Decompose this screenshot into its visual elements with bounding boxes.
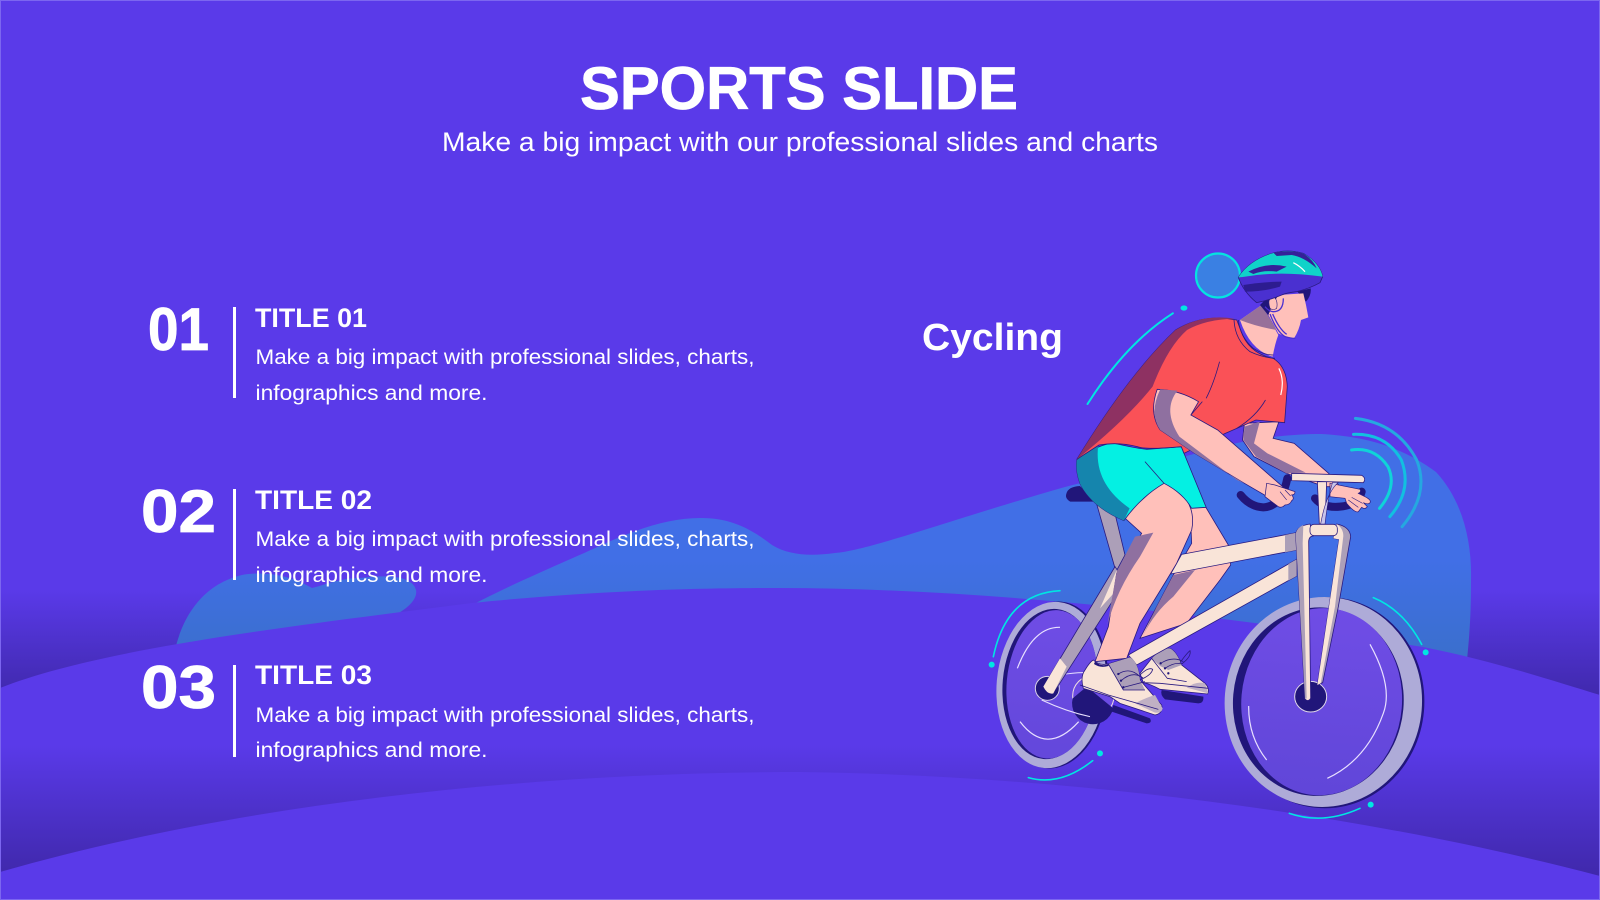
item 03 bbox=[141, 654, 754, 762]
collar bbox=[1234, 320, 1275, 358]
cables bbox=[1321, 482, 1338, 524]
text 01: infographics and more. bbox=[256, 381, 488, 405]
number 03: 03 bbox=[141, 654, 216, 721]
text 03: infographics and more. bbox=[256, 738, 488, 762]
motion arc: back bbox=[1088, 313, 1173, 404]
subtitle: Make a big impact with our professional slides and charts bbox=[442, 127, 1158, 157]
title: SPORTS SLIDE bbox=[580, 55, 1018, 122]
number 01: 01 bbox=[148, 296, 209, 363]
front leg bbox=[1095, 480, 1193, 662]
cyclist head bbox=[1234, 251, 1323, 358]
far hand bbox=[1330, 483, 1370, 512]
label: Cycling: Cycling bbox=[922, 316, 1063, 359]
heading 03: TITLE 03 bbox=[255, 660, 372, 690]
neck bbox=[1240, 305, 1278, 357]
handlebar bbox=[1292, 473, 1365, 483]
divider 03 bbox=[233, 665, 236, 757]
motion dots bbox=[989, 649, 1429, 808]
motion arcs bbox=[993, 591, 1422, 818]
shorts bbox=[1076, 443, 1206, 521]
text 02: Make a big impact with professional slides, charts, bbox=[256, 527, 754, 551]
illustration: shorts, shirt and near arm bbox=[1076, 317, 1287, 521]
front fork bbox=[1296, 524, 1351, 701]
hair bbox=[1260, 288, 1311, 317]
text 02: infographics and more. bbox=[256, 563, 488, 587]
illustration: bicycle wheels and lower body bbox=[989, 480, 1433, 818]
motion dot: back bbox=[1181, 305, 1187, 311]
far arm bbox=[1243, 422, 1340, 487]
front wheel bbox=[1216, 589, 1433, 816]
sound arcs bbox=[1352, 418, 1421, 527]
face bbox=[1268, 293, 1308, 338]
stem bbox=[1317, 482, 1327, 524]
near hand bbox=[1265, 483, 1295, 507]
near arm bbox=[1154, 389, 1283, 507]
blue mountains bbox=[175, 434, 1471, 660]
rear frame bbox=[1043, 500, 1125, 694]
front hub bbox=[1295, 681, 1327, 712]
hill: front layer bbox=[0, 772, 1600, 900]
illustration: saddle, drops and far arm bbox=[1066, 422, 1340, 502]
text 03: Make a big impact with professional slides, charts, bbox=[256, 703, 754, 727]
text 01: Make a big impact with professional slides, charts, bbox=[256, 345, 754, 369]
front shoe bbox=[1080, 657, 1163, 723]
back wheel bbox=[990, 597, 1115, 773]
illustration: motion lines bbox=[1088, 305, 1421, 527]
handlebar drops bbox=[1241, 478, 1362, 507]
t-shirt bbox=[1077, 317, 1287, 459]
hill: middle layer bbox=[0, 588, 1600, 900]
icon: blue circle behind helmet bbox=[1196, 254, 1240, 298]
item 01 bbox=[148, 296, 754, 405]
rear leg bbox=[1140, 507, 1231, 638]
ear and strap bbox=[1265, 297, 1295, 338]
divider 01 bbox=[233, 307, 236, 398]
number 02: 02 bbox=[141, 478, 216, 545]
rear shoe bbox=[1140, 648, 1208, 703]
heading 01: TITLE 01 bbox=[255, 303, 367, 333]
handlebar assembly bbox=[1241, 473, 1370, 524]
top tube bbox=[1171, 533, 1297, 574]
helmet bbox=[1238, 251, 1323, 303]
heading 02: TITLE 02 bbox=[255, 485, 372, 515]
item 02 bbox=[141, 478, 754, 587]
down tube bbox=[1128, 559, 1297, 665]
saddle bbox=[1066, 486, 1097, 502]
divider 02 bbox=[233, 489, 236, 580]
